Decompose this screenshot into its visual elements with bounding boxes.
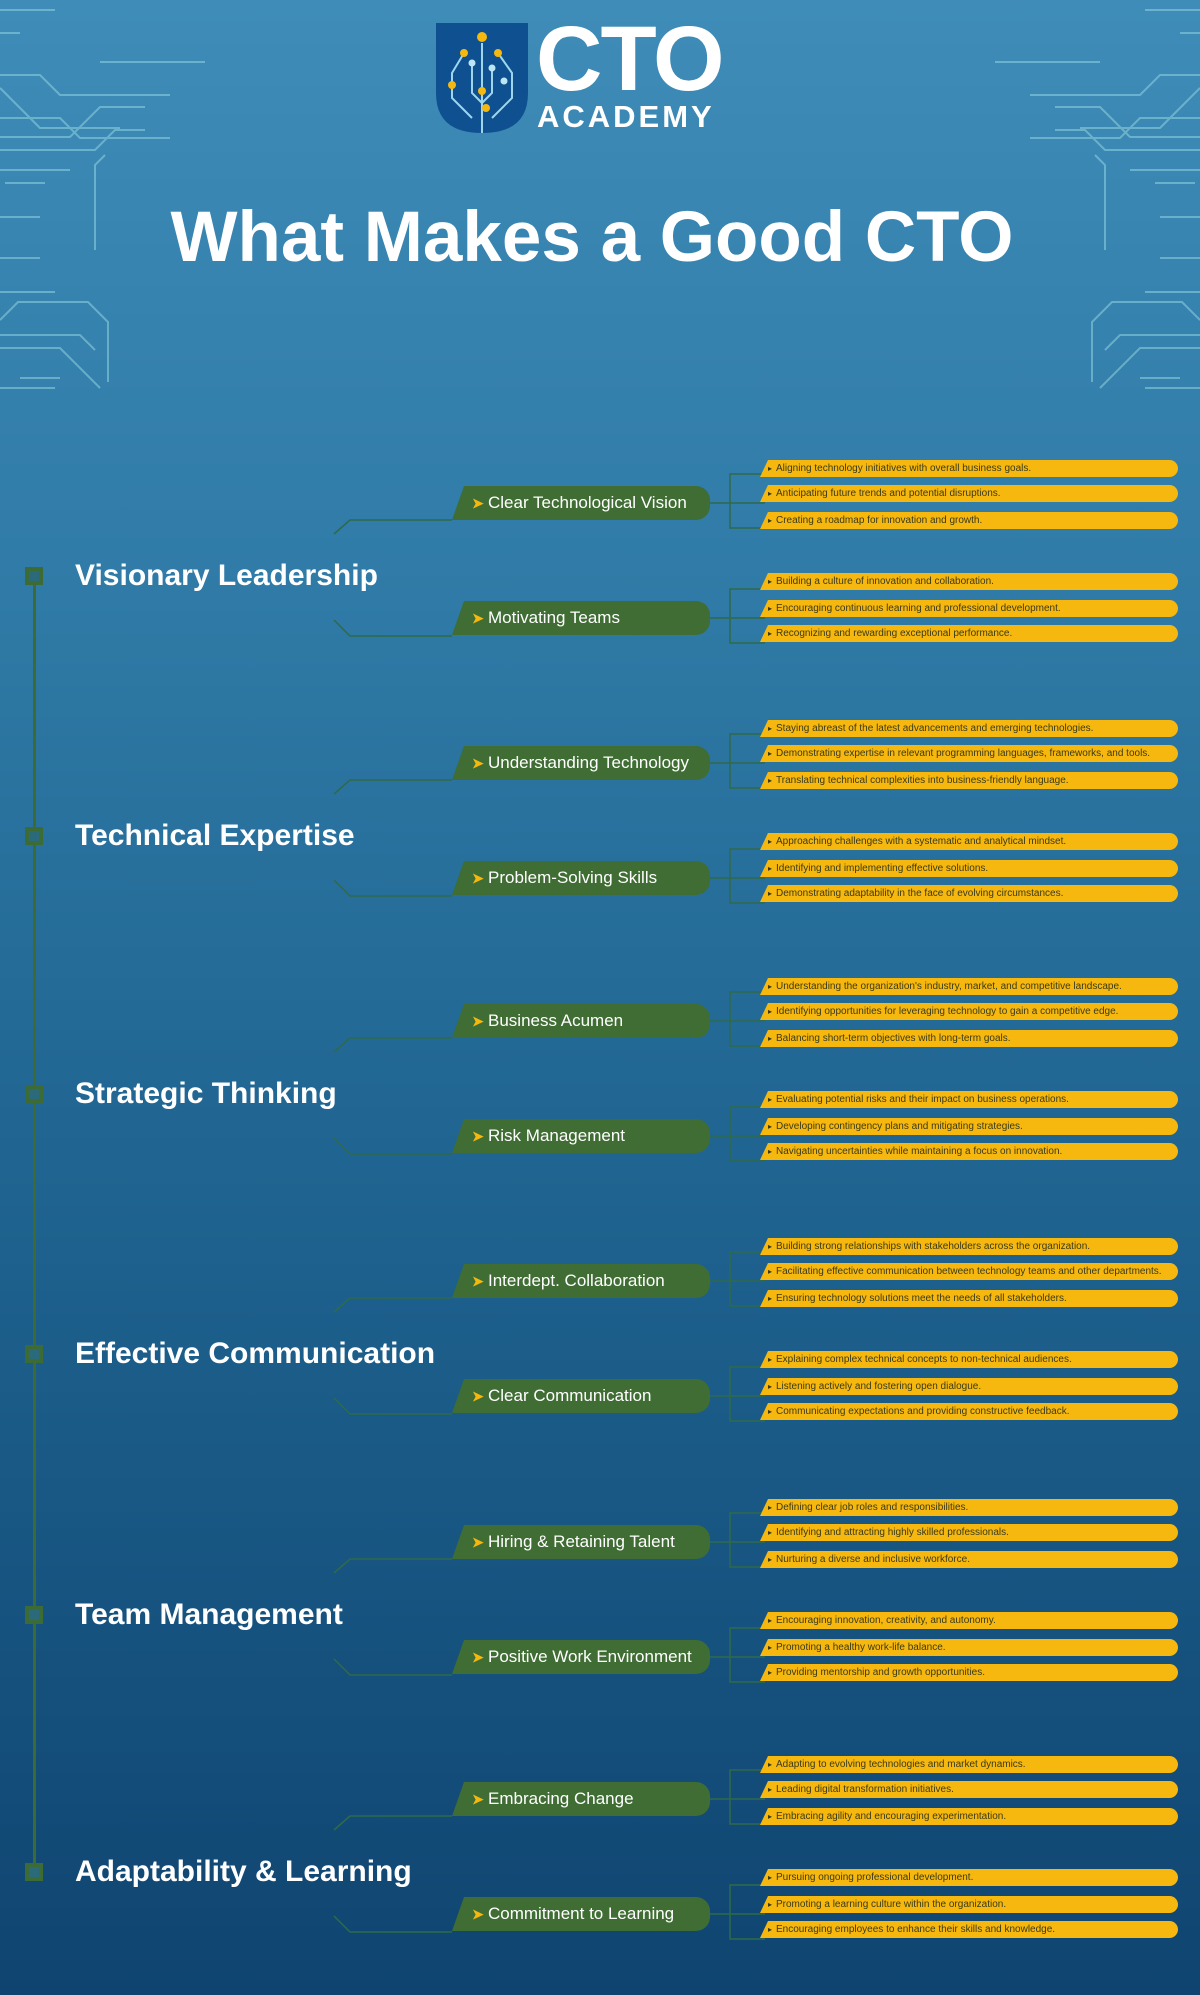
section: Team Management: Promoting a healthy work-life balance.	[776, 1642, 946, 1653]
section: Effective Communication: Clear Communication	[488, 1386, 651, 1405]
section: Effective Communication: Communicating expectations and providing constructive feedback.	[776, 1406, 1070, 1417]
section: Strategic Thinking: Business Acumen	[488, 1011, 623, 1030]
section: Adaptability & Learning: ➤	[472, 1791, 484, 1807]
logo text: CTO	[536, 8, 723, 110]
section: Visionary Leadership: Encouraging continuous learning and professional development.	[776, 603, 1061, 614]
section: Visionary Leadership	[25, 460, 1178, 642]
section: Technical Expertise: ➤	[472, 755, 484, 771]
section: Adaptability & Learning: Leading digital transformation initiatives.	[776, 1784, 954, 1795]
section: Visionary Leadership: Motivating Teams	[488, 608, 620, 627]
section: Strategic Thinking: Balancing short-term objectives with long-term goals.	[776, 1033, 1011, 1044]
section: Adaptability & Learning	[25, 1756, 1178, 1938]
section: Visionary Leadership: ➤	[472, 610, 484, 626]
section: Adaptability & Learning: Adapting to evolving technologies and market dynamics.	[776, 1759, 1026, 1770]
section: Strategic Thinking	[25, 978, 1178, 1160]
icon: shield	[436, 23, 528, 133]
section: Strategic Thinking: Evaluating potential risks and their impact on business operations.	[776, 1094, 1069, 1105]
section: Team Management: Team Management	[75, 1598, 343, 1631]
section: Adaptability & Learning: Pursuing ongoing professional development.	[776, 1872, 973, 1883]
section: Strategic Thinking: Identifying opportunities for leveraging technology to gain a competitive edge.	[776, 1006, 1118, 1017]
section: Visionary Leadership: ➤	[472, 495, 484, 511]
section: Visionary Leadership: Recognizing and rewarding exceptional performance.	[776, 628, 1012, 639]
section: Strategic Thinking: ➤	[472, 1013, 484, 1029]
section: Strategic Thinking: Risk Management	[488, 1126, 625, 1145]
section: Effective Communication: Ensuring technology solutions meet the needs of all stakeholders.	[776, 1293, 1067, 1304]
section: Effective Communication: Building strong relationships with stakeholders across the organization.	[776, 1241, 1090, 1252]
circuit decoration	[0, 9, 1200, 389]
section: Adaptability & Learning: ➤	[472, 1906, 484, 1922]
section: Effective Communication: Effective Communication	[75, 1337, 435, 1370]
section: Technical Expertise: Demonstrating expertise in relevant programming languages, frameworks, and tools.	[776, 748, 1150, 759]
title: What Makes a Good CTO	[171, 198, 1013, 277]
section: Technical Expertise: Demonstrating adaptability in the face of evolving circumstances.	[776, 888, 1063, 899]
section: Team Management: Providing mentorship and growth opportunities.	[776, 1667, 985, 1678]
section: Team Management: Encouraging innovation, creativity, and autonomy.	[776, 1615, 996, 1626]
timeline line	[33, 576, 36, 1872]
section: Technical Expertise: Identifying and implementing effective solutions.	[776, 863, 988, 874]
section: Technical Expertise	[25, 720, 1178, 902]
section: Team Management: Identifying and attracting highly skilled professionals.	[776, 1527, 1009, 1538]
section: Technical Expertise: Translating technical complexities into business-friendly language.	[776, 775, 1069, 786]
section: Team Management: ➤	[472, 1534, 484, 1550]
section: Adaptability & Learning: Commitment to Learning	[488, 1904, 674, 1923]
section: Technical Expertise: ➤	[472, 870, 484, 886]
section: Visionary Leadership: Creating a roadmap for innovation and growth.	[776, 515, 982, 526]
section: Effective Communication: Facilitating effective communication between technology teams and other departments.	[776, 1266, 1162, 1277]
section: Adaptability & Learning: Embracing agility and encouraging experimentation.	[776, 1811, 1006, 1822]
section: Effective Communication	[25, 1238, 1178, 1420]
section: Team Management: Positive Work Environment	[488, 1647, 692, 1666]
section: Effective Communication: Interdept. Collaboration	[488, 1271, 665, 1290]
section: Strategic Thinking: Navigating uncertainties while maintaining a focus on innovation.	[776, 1146, 1062, 1157]
section: Technical Expertise: Staying abreast of the latest advancements and emerging technologies.	[776, 723, 1093, 734]
section: Strategic Thinking: Strategic Thinking	[75, 1077, 337, 1110]
section: Strategic Thinking: Understanding the organization's industry, market, and competitive landscape.	[776, 981, 1122, 992]
section: Effective Communication: Explaining complex technical concepts to non-technical audiences.	[776, 1354, 1072, 1365]
section: Technical Expertise: Understanding Technology	[488, 753, 689, 772]
section: Technical Expertise: Approaching challenges with a systematic and analytical mindset.	[776, 836, 1066, 847]
section: Team Management	[25, 1499, 1178, 1681]
section: Strategic Thinking: ➤	[472, 1128, 484, 1144]
section: Adaptability & Learning: Embracing Change	[488, 1789, 634, 1808]
section: Team Management: ➤	[472, 1649, 484, 1665]
section: Effective Communication: Listening actively and fostering open dialogue.	[776, 1381, 981, 1392]
section: Visionary Leadership: Anticipating future trends and potential disruptions.	[776, 488, 1001, 499]
section: Adaptability & Learning: Encouraging employees to enhance their skills and knowledge.	[776, 1924, 1055, 1935]
section: Strategic Thinking: Developing contingency plans and mitigating strategies.	[776, 1121, 1023, 1132]
section: Adaptability & Learning: Promoting a learning culture within the organization.	[776, 1899, 1006, 1910]
section: Technical Expertise: Problem-Solving Skills	[488, 868, 657, 887]
section: Visionary Leadership: Clear Technological Vision	[488, 493, 687, 512]
section: Visionary Leadership: Visionary Leadership	[75, 559, 378, 592]
logo: ACADEMY	[537, 99, 715, 134]
section: Effective Communication: ➤	[472, 1273, 484, 1289]
section: Technical Expertise: Technical Expertise	[75, 819, 355, 852]
section: Team Management: Defining clear job roles and responsibilities.	[776, 1502, 968, 1513]
section: Team Management: Nurturing a diverse and inclusive workforce.	[776, 1554, 970, 1565]
logo	[436, 8, 723, 134]
section: Team Management: Hiring & Retaining Talent	[488, 1532, 675, 1551]
section: Visionary Leadership: Aligning technology initiatives with overall business goals.	[776, 463, 1031, 474]
section: Effective Communication: ➤	[472, 1388, 484, 1404]
section: Adaptability & Learning: Adaptability & Learning	[75, 1855, 412, 1888]
section: Visionary Leadership: Building a culture of innovation and collaboration.	[776, 576, 994, 587]
